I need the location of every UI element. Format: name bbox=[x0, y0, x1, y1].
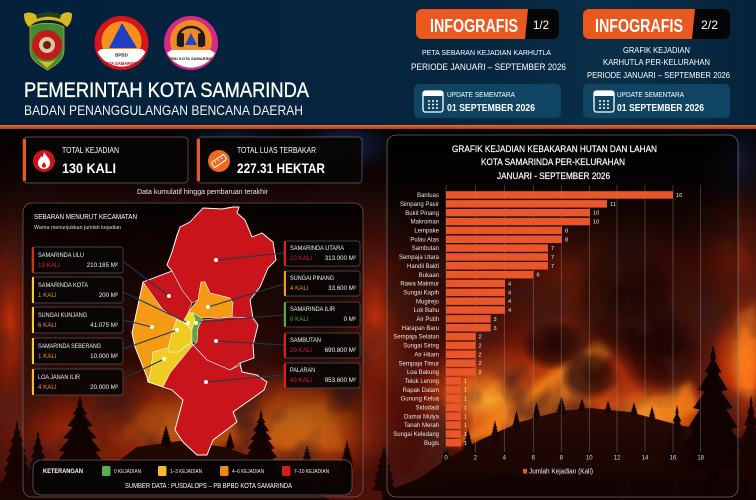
card: Sungai Kunjang: 6 KALI bbox=[38, 322, 57, 329]
legend and source: KETERANGAN bbox=[43, 468, 83, 475]
legend and source: SUMBER DATA : PUSDALOPS – PB BPBD KOTA SAMARINDA bbox=[125, 483, 292, 490]
background: forest fire scene bbox=[0, 110, 756, 500]
chart x axis labels: 10 bbox=[586, 456, 593, 462]
card: Loa Janan Ilir: 4 KALI bbox=[38, 384, 57, 391]
chart category labels: Bugis bbox=[424, 441, 439, 447]
chart category labels: Teluk Lerong bbox=[405, 379, 439, 385]
chart category labels: Sungai Kapih bbox=[403, 290, 439, 296]
card: Samarinda Seberang bbox=[32, 338, 123, 364]
chart x axis labels: 18 bbox=[697, 456, 705, 462]
chart gridlines bbox=[446, 185, 701, 452]
subtitle: Badan Penanggulangan Bencana Daerah: BADAN PENANGGULANGAN BENCANA DAERAH bbox=[24, 102, 303, 118]
chart x axis labels: 2 bbox=[474, 456, 478, 462]
chart value labels: 1 bbox=[464, 379, 467, 385]
card: Sambutan: 690.800 M² bbox=[325, 347, 356, 354]
smoke billows bbox=[520, 235, 702, 401]
icon: flame bbox=[33, 150, 55, 172]
chart category labels: Mugirejo bbox=[416, 299, 440, 305]
card: Samarinda Utara: SAMARINDA UTARA bbox=[290, 245, 345, 252]
stat card: total luas terbakar bbox=[197, 137, 362, 183]
card: Samarinda Seberang: 10.000 M² bbox=[90, 353, 118, 360]
text: description of infographic 2: KARHUTLA PER-KELURAHAN bbox=[603, 58, 710, 67]
chart category labels: Sempaja Selatan bbox=[393, 335, 439, 341]
text: description of infographic 2 bbox=[587, 46, 731, 80]
panel: map by district bbox=[23, 203, 363, 497]
logo: Pusdalops BPBD Kota Samarinda: BPBD KOTA SAMARINDA bbox=[167, 56, 216, 61]
chart value labels: 7 bbox=[551, 255, 554, 261]
update box 2 bbox=[583, 84, 730, 118]
chart value labels: 8 bbox=[565, 237, 568, 243]
title: Pemerintah Kota Samarinda: PEMERINTAH KOTA SAMARINDA bbox=[24, 78, 310, 102]
card: Sungai Pinang: SUNGAI PINANG bbox=[290, 275, 334, 282]
chart x axis labels bbox=[444, 456, 705, 462]
card: Samarinda Ulu: 210.185 M² bbox=[87, 262, 118, 269]
chart value labels: 7 bbox=[551, 246, 554, 252]
legend and source: 1–3 KEJADIAN bbox=[170, 469, 202, 475]
chart value labels: 7 bbox=[551, 264, 554, 270]
icon: burnt area bbox=[208, 150, 230, 172]
card: Samarinda Ulu bbox=[32, 247, 123, 273]
text: description of infographic 2: GRAFIK KEJADIAN bbox=[623, 46, 690, 55]
logo: BPBD Kota Samarinda: KOTA SAMARINDA bbox=[102, 61, 141, 66]
update box 1: 01 SEPTEMBER 2026 bbox=[447, 103, 535, 114]
chart value labels: 4 bbox=[508, 282, 511, 288]
card: Palaran bbox=[284, 363, 360, 388]
chart category labels: Makroman bbox=[411, 220, 439, 226]
badge: infografis 1/2 bbox=[416, 9, 559, 39]
chart x axis labels: 8 bbox=[560, 456, 564, 462]
header band bbox=[0, 0, 756, 129]
choropleth map of Samarinda bbox=[132, 207, 276, 455]
legend and source bbox=[33, 460, 352, 495]
stat card: total kejadian: 130 KALI bbox=[62, 160, 116, 176]
legend and source: 0 KEJADIAN bbox=[114, 469, 141, 475]
hills and pine tree silhouettes bbox=[0, 345, 756, 500]
card: Samarinda Kota: SAMARINDA KOTA bbox=[38, 282, 89, 289]
chart title bbox=[452, 144, 657, 181]
panel heading: SEBARAN MENURUT KECAMATAN bbox=[34, 214, 137, 221]
badge: infografis 2/2: 2/2 bbox=[701, 18, 718, 32]
card: Samarinda Ilir bbox=[284, 302, 360, 327]
chart value labels: 1 bbox=[464, 405, 467, 411]
chart value labels: 6 bbox=[536, 273, 540, 279]
badge: infografis 2/2: INFOGRAFIS bbox=[595, 16, 683, 36]
chart category labels: Sungai Siring bbox=[403, 344, 439, 350]
stat card: total luas terbakar: TOTAL LUAS TERBAKAR bbox=[237, 146, 316, 155]
badge: infografis 1/2: 1/2 bbox=[533, 18, 549, 32]
chart category labels: Gunung Kelua bbox=[401, 397, 440, 403]
chart category labels: Sambutan bbox=[412, 246, 439, 252]
chart category labels: Bantuas bbox=[417, 193, 439, 199]
badge: infografis 2/2 bbox=[583, 9, 730, 39]
chart category labels: Bukit Pinang bbox=[405, 211, 439, 217]
text: description of infographic 2: PERIODE JANUARI – SEPTEMBER 2026 bbox=[587, 71, 731, 80]
card: Samarinda Ilir: SAMARINDA ILIR bbox=[290, 306, 335, 313]
chart category labels: Sempaja Utara bbox=[399, 255, 440, 261]
chart category labels: Damai Mulya bbox=[404, 414, 440, 420]
stat card: total kejadian bbox=[23, 137, 188, 183]
update box 2: UPDATE SEMENTARA bbox=[617, 92, 684, 99]
badge: infografis 1/2: INFOGRAFIS bbox=[430, 16, 518, 36]
card: Samarinda Utara bbox=[284, 241, 360, 266]
chart category labels: Rapak Dalam bbox=[403, 388, 439, 394]
chart category labels: Bukaan bbox=[419, 273, 439, 279]
update box 1 bbox=[414, 84, 561, 118]
card: Samarinda Kota bbox=[32, 277, 123, 303]
card: Sungai Kunjang: 41.075 M² bbox=[90, 322, 118, 329]
card: Sungai Pinang: 4 KALI bbox=[290, 285, 309, 292]
card: Sambutan: 29 KALI bbox=[290, 347, 312, 354]
stat card: total kejadian: TOTAL KEJADIAN bbox=[62, 146, 119, 155]
chart value labels: 10 bbox=[593, 220, 599, 226]
card: Palaran: 953.600 M² bbox=[325, 377, 356, 384]
chart title: JANUARI - SEPTEMBER 2026 bbox=[497, 171, 610, 181]
icon: calendar bbox=[594, 91, 614, 112]
chart value labels: 3 bbox=[494, 317, 497, 323]
chart category labels: Handil Bakti bbox=[407, 264, 439, 270]
chart category labels: Sidodadi bbox=[416, 406, 439, 412]
icon: calendar bbox=[423, 91, 443, 112]
chart category labels: Harapan Baru bbox=[402, 326, 439, 332]
chart x axis labels: 16 bbox=[670, 456, 677, 462]
card: Sungai Pinang bbox=[284, 271, 360, 296]
chart value labels: 8 bbox=[565, 228, 568, 234]
chart value labels: 2 bbox=[478, 344, 482, 350]
stat card: total luas terbakar: 227.31 HEKTAR bbox=[237, 160, 325, 176]
chart category labels: Tanah Merah bbox=[404, 423, 439, 429]
chart category labels: Sempaja Timur bbox=[399, 361, 439, 367]
chart category labels: Loa Bakung bbox=[407, 370, 439, 376]
map outline bbox=[132, 207, 276, 455]
chart value labels: 1 bbox=[464, 397, 467, 403]
chart value labels: 2 bbox=[478, 352, 482, 358]
card: Loa Janan Ilir bbox=[32, 369, 123, 395]
chart value labels: 10 bbox=[593, 211, 599, 217]
card: Samarinda Utara: 23 KALI bbox=[290, 255, 312, 262]
logo: Pusdalops BPBD Kota Samarinda bbox=[164, 16, 218, 70]
chart title: GRAFIK KEJADIAN KEBAKARAN HUTAN DAN LAHAN bbox=[452, 144, 657, 154]
chart title: KOTA SAMARINDA PER-KELURAHAN bbox=[481, 157, 625, 167]
chart category labels: Lempake bbox=[414, 228, 440, 234]
card: Sambutan bbox=[284, 333, 360, 358]
chart value labels: 4 bbox=[508, 308, 511, 314]
chart x axis labels: 12 bbox=[614, 456, 621, 462]
card: Sungai Kunjang bbox=[32, 307, 123, 333]
legend and source: 7–10 KEJADIAN bbox=[294, 469, 329, 475]
chart value labels: 3 bbox=[494, 326, 497, 332]
chart value labels: 1 bbox=[464, 432, 467, 438]
chart value labels: 11 bbox=[610, 202, 616, 208]
update box 1: UPDATE SEMENTARA bbox=[447, 92, 515, 99]
chart value labels: 1 bbox=[464, 441, 467, 447]
card: Samarinda Kota: 200 M² bbox=[99, 292, 118, 299]
chart value labels: 2 bbox=[478, 335, 482, 341]
legend and source: 4–6 KEJADIAN bbox=[232, 469, 264, 475]
card: Samarinda Ilir: 0 M² bbox=[344, 316, 356, 323]
chart value labels: 1 bbox=[464, 388, 467, 394]
chart category labels: Lok Bahu bbox=[414, 308, 439, 314]
card: Palaran: 43 KALI bbox=[290, 377, 312, 384]
update box 2: 01 SEPTEMBER 2026 bbox=[617, 103, 704, 114]
card: Samarinda Kota: 1 KALI bbox=[38, 292, 57, 299]
card: Samarinda Ilir: 0 KALI bbox=[290, 316, 309, 323]
card: Loa Janan Ilir: 20.000 M² bbox=[90, 384, 118, 391]
card: Samarinda Seberang: SAMARINDA SEBERANG bbox=[38, 343, 101, 350]
chart value labels: 4 bbox=[508, 299, 511, 305]
panel heading bbox=[34, 214, 137, 231]
card: Sambutan: SAMBUTAN bbox=[290, 337, 321, 344]
card: Loa Janan Ilir: LOA JANAN ILIR bbox=[38, 374, 80, 381]
chart value labels: 2 bbox=[478, 361, 482, 367]
card: Samarinda Utara: 313.000 M² bbox=[325, 255, 356, 262]
card: Sungai Pinang: 33.600 M² bbox=[328, 285, 356, 292]
text: description of infographic 1 bbox=[411, 48, 566, 72]
panel heading: Warna menunjukkan jumlah kejadian bbox=[34, 225, 121, 231]
chart legend: Jumlah Kejadian (Kali) bbox=[529, 468, 593, 476]
chart category labels bbox=[393, 193, 440, 447]
text: description of infographic 1: PERIODE JANUARI – SEPTEMBER 2026 bbox=[411, 62, 566, 72]
card: Samarinda Ulu: 19 KALI bbox=[38, 262, 60, 269]
panel: bar chart of incidents per kelurahan bbox=[387, 135, 738, 497]
chart x axis labels: 4 bbox=[503, 456, 507, 462]
chart value labels: 1 bbox=[464, 414, 467, 420]
chart category labels: Air Putih bbox=[416, 317, 439, 323]
chart value labels: 4 bbox=[508, 290, 511, 296]
chart x axis labels: 0 bbox=[444, 456, 448, 462]
note: cumulative data: Data kumulatif hingga pembaruan terakhir bbox=[137, 189, 269, 196]
chart value labels bbox=[464, 193, 682, 447]
leader lines and location dots bbox=[123, 253, 284, 384]
card: Samarinda Ulu: SAMARINDA ULU bbox=[38, 252, 84, 259]
chart category labels: Air Hitam bbox=[414, 352, 439, 358]
chart category labels: Pulau Atas bbox=[410, 237, 439, 243]
chart value labels: 2 bbox=[478, 370, 482, 376]
chart category labels: Rawa Makmur bbox=[400, 282, 439, 288]
chart value labels: 16 bbox=[676, 193, 682, 199]
chart bars bbox=[446, 191, 673, 446]
chart x axis labels: 14 bbox=[642, 456, 649, 462]
logo: Kota Samarinda crest bbox=[24, 12, 72, 70]
logo: BPBD Kota Samarinda bbox=[94, 16, 148, 70]
logo: BPBD Kota Samarinda: BPBD bbox=[115, 52, 129, 58]
flame front streaks bbox=[110, 300, 756, 450]
chart value labels: 1 bbox=[464, 423, 467, 429]
text: description of infographic 1: PETA SEBARAN KEJADIAN KARHUTLA bbox=[422, 48, 551, 57]
chart x axis labels: 6 bbox=[532, 456, 536, 462]
card: Samarinda Seberang: 1 KALI bbox=[38, 353, 57, 360]
card: Sungai Kunjang: SUNGAI KUNJANG bbox=[38, 312, 87, 319]
chart category labels: Simpang Pasir bbox=[400, 202, 439, 208]
chart category labels: Sungai Keledang bbox=[393, 432, 439, 438]
card: Palaran: PALARAN bbox=[290, 367, 315, 374]
